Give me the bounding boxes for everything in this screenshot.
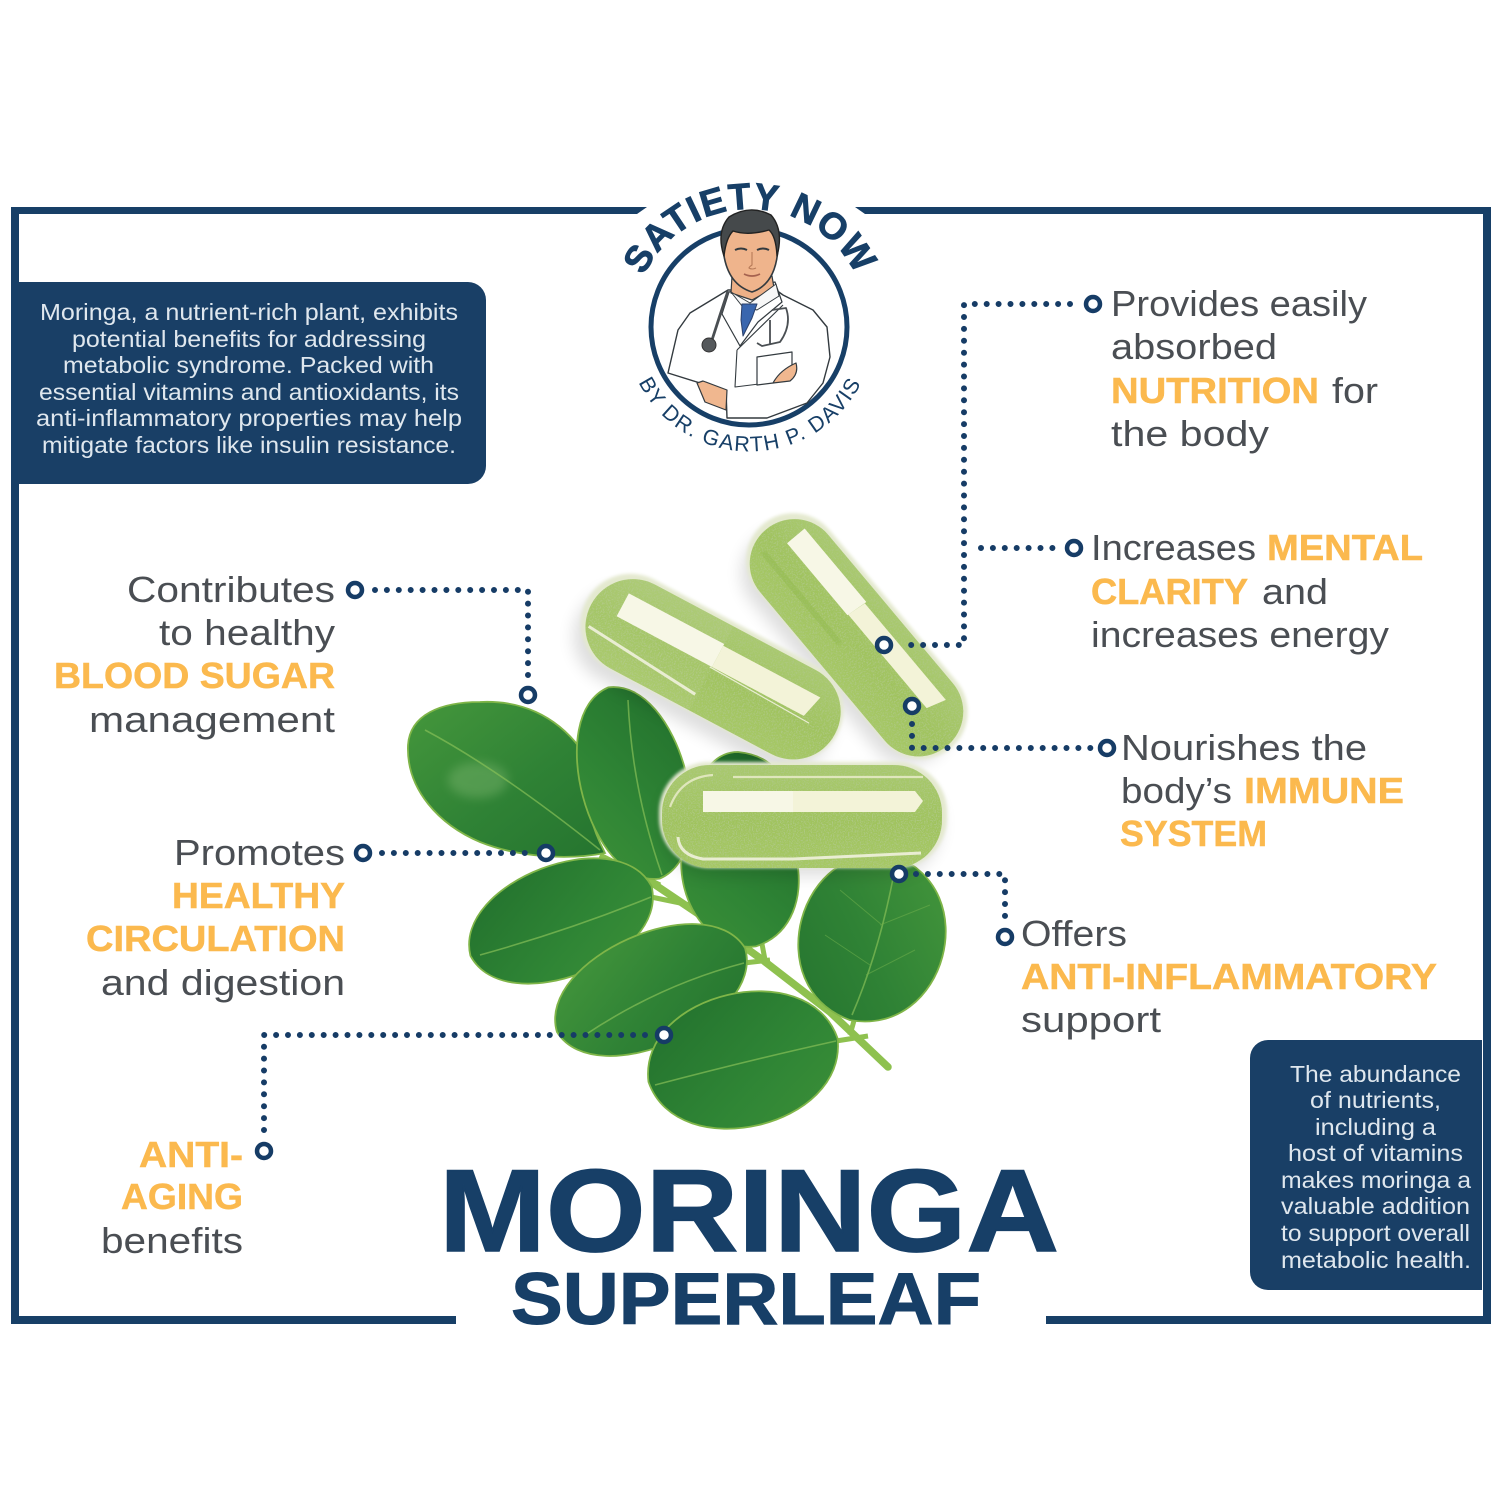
stem <box>645 878 888 1067</box>
subtitle: SUPERLEAF <box>511 1259 981 1340</box>
callout: immune system: IMMUNE <box>1244 770 1404 811</box>
capsule upper right <box>727 494 987 778</box>
connector: anti-inflammatory <box>892 867 1012 944</box>
page frame <box>11 207 1491 1324</box>
callout: blood sugar <box>54 569 335 740</box>
panel: intro text box: anti-inflammatory properties may help <box>36 405 462 431</box>
connector: blood sugar <box>348 583 535 702</box>
capsule horizontal <box>659 762 947 868</box>
vein <box>852 868 895 1015</box>
panel: closing text box: metabolic health. <box>1281 1247 1471 1273</box>
callout: nutrition: Provides easily <box>1111 283 1367 324</box>
panel: closing text box: to support overall <box>1281 1220 1470 1246</box>
callout: circulation: Promotes <box>174 832 345 873</box>
panel: intro text box: mitigate factors like insulin resistance. <box>42 432 456 458</box>
vein <box>655 1041 836 1085</box>
connector: anti-aging <box>257 1028 671 1158</box>
doctor portrait <box>668 210 830 418</box>
capsule shadows <box>557 510 972 876</box>
callout: blood sugar: to healthy <box>159 612 335 653</box>
connector: nutrition <box>877 297 1100 652</box>
logo byline: BY DR. GARTH P. DAVIS <box>639 376 859 452</box>
callout: blood sugar: management <box>89 699 335 740</box>
panel: intro text box: potential benefits for addressing <box>72 326 426 352</box>
capsules <box>557 494 987 876</box>
callout: mental clarity: increases energy <box>1091 614 1389 655</box>
callout: mental clarity <box>1091 527 1423 655</box>
title <box>439 1145 1059 1340</box>
callout: blood sugar: Contributes <box>127 569 335 610</box>
leaf behind capsule <box>708 752 770 790</box>
panel: closing text box: host of vitamins <box>1288 1140 1463 1166</box>
connector: immune system <box>905 699 1114 755</box>
logo wordmark: SATIETY NOW <box>624 182 878 272</box>
panel: closing text box: valuable addition <box>1281 1193 1470 1219</box>
callout: immune system: Nourishes the <box>1121 727 1367 768</box>
callout: nutrition <box>1111 283 1378 454</box>
leaf mottling <box>448 762 508 798</box>
callout: blood sugar: BLOOD SUGAR <box>54 655 335 696</box>
leaf upper left <box>408 702 605 857</box>
callout: anti-aging: AGING <box>121 1176 243 1217</box>
callout: anti-inflammatory: Offers <box>1021 913 1127 954</box>
panel: closing text box: makes moringa a <box>1281 1167 1472 1193</box>
logo ring <box>651 229 847 425</box>
callout: circulation: and digestion <box>101 962 345 1003</box>
panel: closing text box: of nutrients, <box>1310 1087 1441 1113</box>
connector: circulation <box>356 846 553 860</box>
callout: mental clarity: and <box>1262 571 1328 612</box>
callout: immune system <box>1120 727 1404 854</box>
vein <box>425 730 600 850</box>
callout: mental clarity: Increases <box>1091 527 1256 568</box>
moringa leaves <box>408 674 964 1147</box>
vein <box>585 963 744 1035</box>
panel: intro text box <box>18 282 486 484</box>
callout: nutrition: NUTRITION <box>1111 370 1319 411</box>
panel: intro text box: Moringa, a nutrient-rich plant, exhibits <box>40 299 458 325</box>
callout: mental clarity: CLARITY <box>1091 571 1248 612</box>
leaf upper centre <box>557 674 711 892</box>
callout: anti-aging: benefits <box>101 1220 243 1261</box>
callout: mental clarity: MENTAL <box>1267 527 1423 568</box>
callout: anti-inflammatory <box>1021 913 1437 1040</box>
capsule upper left <box>563 556 861 778</box>
panel: closing text box: including a <box>1315 1114 1437 1140</box>
leaf right <box>780 837 964 1039</box>
callout: immune system: SYSTEM <box>1120 813 1267 854</box>
callout: anti-aging: ANTI- <box>139 1134 243 1175</box>
callout: anti-inflammatory: ANTI-INFLAMMATORY <box>1021 956 1437 997</box>
callout: nutrition: for <box>1332 370 1378 411</box>
panel: intro text box: metabolic syndrome. Packed with <box>63 352 434 378</box>
callout: immune system: body’s <box>1121 770 1232 811</box>
panel: intro text box: essential vitamins and antioxidants, its <box>39 379 459 405</box>
callout: circulation: CIRCULATION <box>86 918 345 959</box>
panel: closing text box: The abundance <box>1290 1061 1461 1087</box>
vein <box>628 700 662 875</box>
title: MORINGA <box>439 1145 1059 1276</box>
callout: nutrition: the body <box>1111 413 1269 454</box>
leaf lower centre <box>534 897 768 1083</box>
leaf bottom <box>633 973 853 1147</box>
connector: mental clarity <box>981 541 1081 555</box>
logo: Satiety Now <box>624 182 878 452</box>
panel: closing text box <box>1250 1040 1482 1290</box>
leaf under capsule <box>668 786 812 958</box>
callout: anti-aging <box>101 1134 243 1261</box>
vein <box>480 897 651 955</box>
callout: anti-inflammatory: support <box>1021 999 1161 1040</box>
callout: nutrition: absorbed <box>1111 326 1277 367</box>
callout: circulation: HEALTHY <box>172 875 345 916</box>
leaf lower left <box>450 834 672 1008</box>
callout: circulation <box>86 832 345 1003</box>
